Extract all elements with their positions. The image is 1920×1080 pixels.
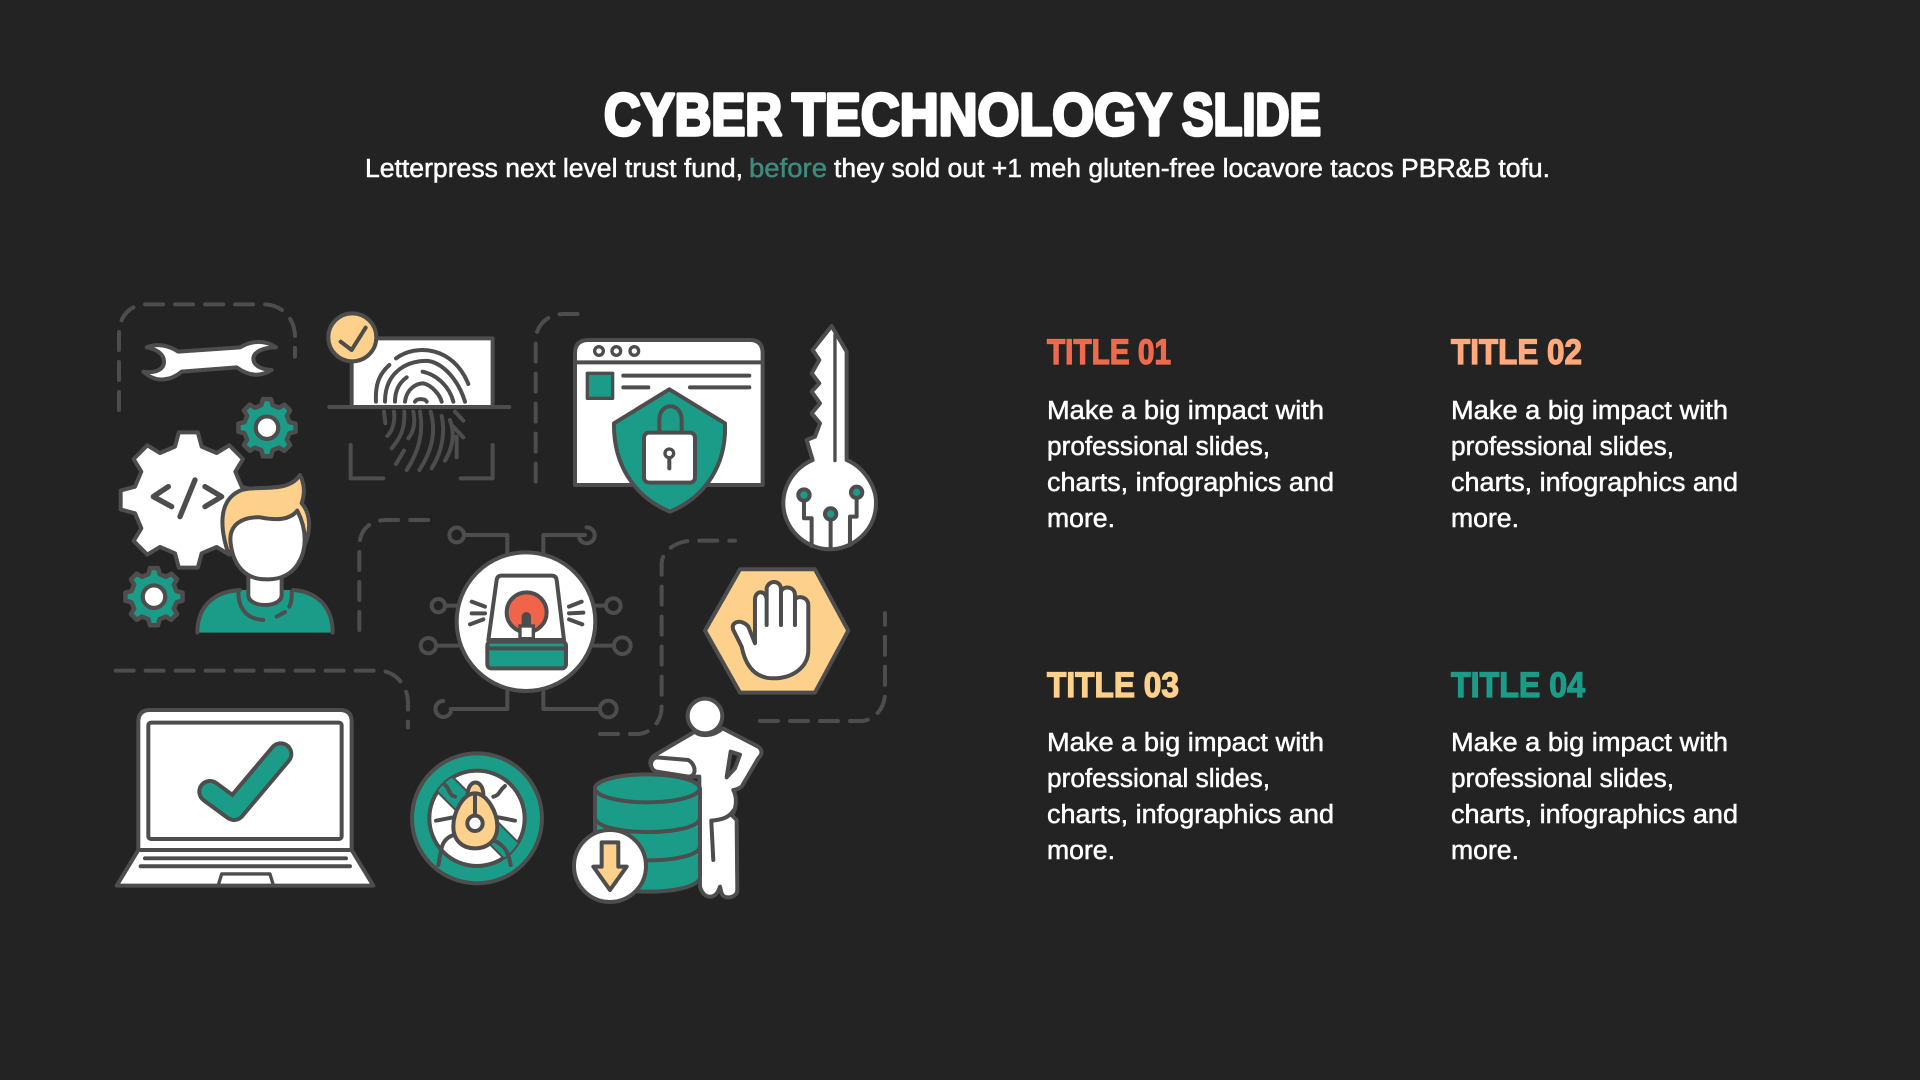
download disc [574,830,646,902]
body text 04: more. [1451,837,1519,865]
check badge [328,313,376,361]
body text 02: Make a big impact with [1451,397,1728,425]
title [604,82,1321,148]
browser frame [575,340,763,485]
body text 03: professional slides, [1047,765,1270,793]
heading 04: TITLE 04 [1451,666,1585,705]
title: SLIDE [1182,82,1321,148]
body text 03: charts, infographics and [1047,801,1334,829]
heading 02: TITLE 02 [1451,333,1582,372]
body text 02: professional slides, [1451,433,1674,461]
fingerprint [376,350,468,470]
body text 01: Make a big impact with [1047,397,1324,425]
subtitle: before [749,155,827,183]
content lines [623,376,749,387]
body text 04: professional slides, [1451,765,1674,793]
scan brackets [351,445,493,478]
alarm disc [457,552,595,691]
icon: no bug badge [412,753,542,883]
icon: code gear and developer [121,432,333,633]
icon: small gear top [238,399,296,456]
shirt outline [197,590,333,633]
body text 01 [1047,397,1334,533]
body text 02: charts, infographics and [1451,469,1738,497]
icon: wrench [143,342,276,379]
sound lines [470,602,583,624]
padlock body [644,433,695,483]
panel: title 04 [1451,666,1738,865]
title: CYBER [604,82,782,148]
title: TECHNOLOGY [792,82,1172,148]
face [230,511,305,579]
panel: title 01 [1047,333,1334,533]
icon: laptop with check [117,710,373,886]
body text 02 [1451,397,1738,533]
window dots [595,347,639,355]
icon: small gear bottom [125,568,183,625]
beacon dome [488,576,564,640]
icon: fingerprint scanner [328,313,509,478]
panel: title 03 [1047,666,1334,865]
subtitle: they sold out +1 meh gluten-free locavore tacos PBR&B tofu. [834,155,1550,183]
subtitle [365,155,1550,183]
body text 04: Make a big impact with [1451,729,1728,757]
body text 03 [1047,729,1334,865]
beacon base [487,642,566,668]
body text 01: more. [1047,505,1115,533]
body text 04: charts, infographics and [1451,801,1738,829]
circuit traces [436,535,614,709]
icon: database with person [574,699,761,902]
icon: browser window with shield [575,340,763,512]
heading 03: TITLE 03 [1047,666,1179,705]
large code gear [121,432,256,568]
shield [614,389,725,512]
neck [248,573,282,605]
teal square [587,373,613,398]
shirt [197,590,333,633]
person head [688,699,722,733]
open circuit terminals [435,527,595,717]
icon: circuit key [783,326,876,549]
scanner screen and base [329,338,509,407]
circuit terminals [421,528,631,717]
keyhole [665,449,674,458]
body text 01: charts, infographics and [1047,469,1334,497]
bulb [522,612,531,631]
panel: title 02 [1451,333,1738,533]
dashed connector lines [116,304,885,734]
body text 02: more. [1451,505,1519,533]
hair [222,475,309,553]
body text 03: more. [1047,837,1115,865]
padlock shackle [659,406,682,433]
illustration: cyber security icons [116,304,885,902]
download arrow [593,842,627,890]
person details [727,752,740,777]
body text 03: Make a big impact with [1047,729,1324,757]
icon: stop hand hexagon [705,569,848,693]
person body [650,728,761,897]
body text 04 [1451,729,1738,865]
icon: alarm beacon with circuit [421,527,631,717]
person arm over database [651,757,695,777]
code brackets [153,480,222,517]
beacon light [507,592,547,632]
check mark [341,328,366,350]
database cylinder [595,788,700,892]
collar [238,592,292,620]
body text 01: professional slides, [1047,433,1270,461]
heading 01: TITLE 01 [1047,333,1171,372]
subtitle: Letterpress next level trust fund, [365,155,743,183]
